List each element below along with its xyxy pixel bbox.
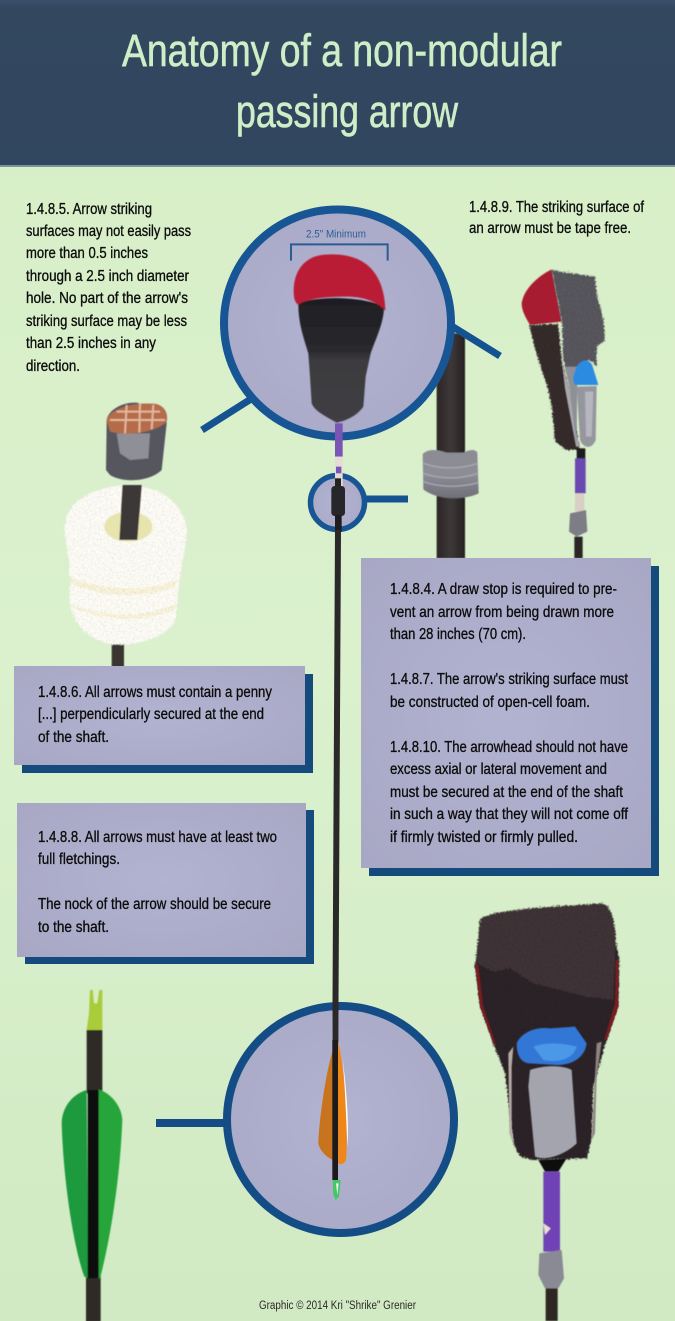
panel text: 1.4.8.10. The arrowhead should not have [390,739,628,756]
title [122,25,562,137]
panel: rules 1.4.8.4, 1.4.8.7, 1.4.8.10 [361,558,659,876]
credit line: Graphic © 2014 Kri "Shrike" Grenier [259,1300,416,1312]
title: Anatomy of a non-modular [122,25,562,76]
long central shaft [332,530,341,1180]
small circle: draw stop [310,476,364,530]
fletching close-up photo [62,990,122,1321]
panel text: full fletchings. [38,851,120,868]
panel text: [...] perpendicularly secured at the end [38,706,264,723]
big circle: striking surface [224,210,451,436]
cut-away arrowhead close-up photo [475,903,619,1321]
connector: big circle to penny example [202,399,251,430]
taped shaft [331,423,345,532]
penny cap [106,403,167,480]
panel text: 1.4.8.8. All arrows must have at least two [38,829,277,846]
left copy: rule 1.4.8.5: direction. [26,358,80,375]
bottom circle: fletching [227,1006,454,1233]
foam cylinder [65,485,187,645]
connector: small circle to draw stop [364,496,408,502]
panel text: to the shaft. [38,919,109,936]
panel text [38,684,272,746]
dimension label: 2.5" Minimum [306,229,366,241]
draw stop tape [423,450,479,498]
panel text: vent an arrow from being drawn more [390,604,614,621]
left copy: rule 1.4.8.5: through a 2.5 inch diameter [26,268,189,285]
penny and foam photo [65,403,187,667]
left copy: rule 1.4.8.5: more than 0.5 inches [26,245,148,262]
panel: rule 1.4.8.6 [14,666,313,773]
panel: rules 1.4.8.8 [17,803,314,964]
panel text: 1.4.8.6. All arrows must contain a penny [38,684,272,701]
left copy: rule 1.4.8.5: 1.4.8.5. Arrow striking [26,201,152,218]
right copy: rule 1.4.8.9: an arrow must be tape free. [469,220,631,237]
left copy: rule 1.4.8.5: surfaces may not easily pass [26,223,191,240]
panel text: excess axial or lateral movement and [390,761,607,778]
wrapped foam head [294,254,385,423]
panel text: must be secured at the end of the shaft [390,784,624,801]
panel text: The nock of the arrow should be secure [38,896,271,913]
panel text: in such a way that they will not come off [390,806,629,823]
panel text: of the shaft. [38,729,109,746]
header banner [0,0,675,167]
left copy: rule 1.4.8.5 [26,201,191,375]
panel text: 1.4.8.4. A draw stop is required to pre- [390,581,617,598]
right copy: rule 1.4.8.9 [469,199,645,237]
large shaft with draw stop [423,333,479,558]
panel text: than 28 inches (70 cm). [390,626,526,643]
connector: big circle to cut-away arrowhead [450,325,500,356]
panel text [390,581,629,846]
cut-away arrowhead photo [522,269,605,558]
foam body [475,903,619,1160]
panel text [38,829,277,936]
central arrow head and shaft top [291,229,388,532]
panel text: if firmly twisted or firmly pulled. [390,829,578,846]
left copy: rule 1.4.8.5: hole. No part of the arrow's [26,290,188,307]
left copy: rule 1.4.8.5: than 2.5 inches in any [26,335,156,352]
right copy: rule 1.4.8.9: 1.4.8.9. The striking surface of [469,199,645,216]
dimension bracket [291,244,388,261]
arrow fletching inside bottom circle [318,1040,348,1200]
title: passing arrow [236,86,458,137]
left copy: rule 1.4.8.5: striking surface may be less [26,313,187,330]
panel text: 1.4.8.7. The arrow's striking surface must [390,671,629,688]
connector: bottom circle to fletching [156,1119,228,1127]
panel text: be constructed of open-cell foam. [390,694,590,711]
